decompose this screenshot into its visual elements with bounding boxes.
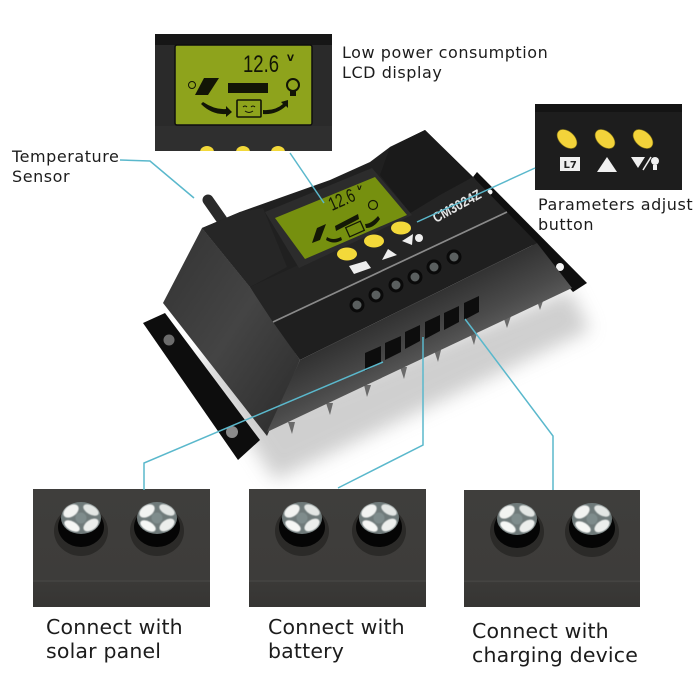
roof left section: [202, 208, 287, 287]
label: charging device: Connect with: [472, 619, 609, 643]
top of body: [202, 130, 507, 322]
controller device: [143, 130, 590, 480]
model name: CM3024Z: [430, 186, 484, 226]
wire ports: [365, 296, 479, 371]
label: solar panel: solar panel: [46, 639, 161, 663]
panel: battery terminal photo: [249, 489, 426, 607]
lcd reading: 12.6: [325, 185, 359, 216]
button symbols: L7: [564, 160, 577, 171]
yellow buttons: [553, 126, 657, 152]
panel: solar panel terminal photo: [33, 489, 210, 607]
panel: LCD close-up: [155, 34, 332, 158]
lower dark band: [273, 212, 537, 360]
label: parameters adjust button: button: [538, 215, 594, 234]
panel: parameter buttons close-up: [535, 104, 682, 190]
label: LCD display: Low power consumption: [342, 43, 548, 62]
lcd unit: V: [287, 54, 294, 64]
button symbols: [560, 157, 659, 172]
icon: battery level bar: [228, 83, 268, 93]
callout line: temperature sensor: [120, 160, 194, 198]
light stripe: [273, 212, 507, 322]
yellow button tops: [200, 146, 285, 158]
lcd icons: [312, 200, 380, 243]
callout line: parameter buttons: [417, 168, 535, 222]
callout line: LCD display: [290, 153, 324, 203]
label: solar panel: Connect with: [46, 615, 183, 639]
label: battery: Connect with: [268, 615, 405, 639]
label: LCD display: LCD display: [342, 63, 442, 82]
screw: [275, 502, 329, 556]
label: temperature sensor: Sensor: [12, 167, 70, 186]
icon: charge arrow: [201, 102, 232, 117]
left end face: [163, 228, 300, 436]
button icons: [349, 234, 423, 274]
screw: [352, 502, 406, 556]
terminal teeth: [288, 298, 544, 434]
screw: [130, 502, 184, 556]
lower front face: [267, 243, 572, 432]
temperature sensor probe: [208, 200, 222, 220]
icon: bulb: [287, 79, 299, 96]
darker roof section above display: [380, 130, 473, 215]
label: temperature sensor: Temperature: [11, 147, 119, 166]
label: charging device: charging device: [472, 643, 638, 667]
mounting plate left: [143, 313, 260, 460]
icon: battery face: [237, 100, 261, 117]
callout line: battery: [338, 337, 423, 488]
terminal screws: [351, 251, 460, 311]
lcd voltage reading: 12.6: [243, 51, 279, 78]
callout line: charging device: [465, 319, 553, 490]
lcd reading: V: [357, 185, 362, 192]
callout line: solar panel: [144, 362, 383, 490]
yellow buttons: [337, 222, 411, 260]
lcd screen: [275, 177, 407, 259]
display bezel: [265, 168, 412, 268]
label: parameters adjust button: Parameters adjust: [538, 195, 693, 214]
screw: [490, 503, 544, 557]
screw: [54, 502, 108, 556]
icon: discharge arrow: [263, 100, 288, 114]
label: battery: battery: [268, 639, 344, 663]
mounting flange right: [473, 172, 587, 292]
icon: sun and solar panel: [188, 78, 219, 95]
panel: charging device terminal photo: [464, 490, 640, 607]
upper band below display: [250, 177, 507, 322]
screw: [565, 503, 619, 557]
